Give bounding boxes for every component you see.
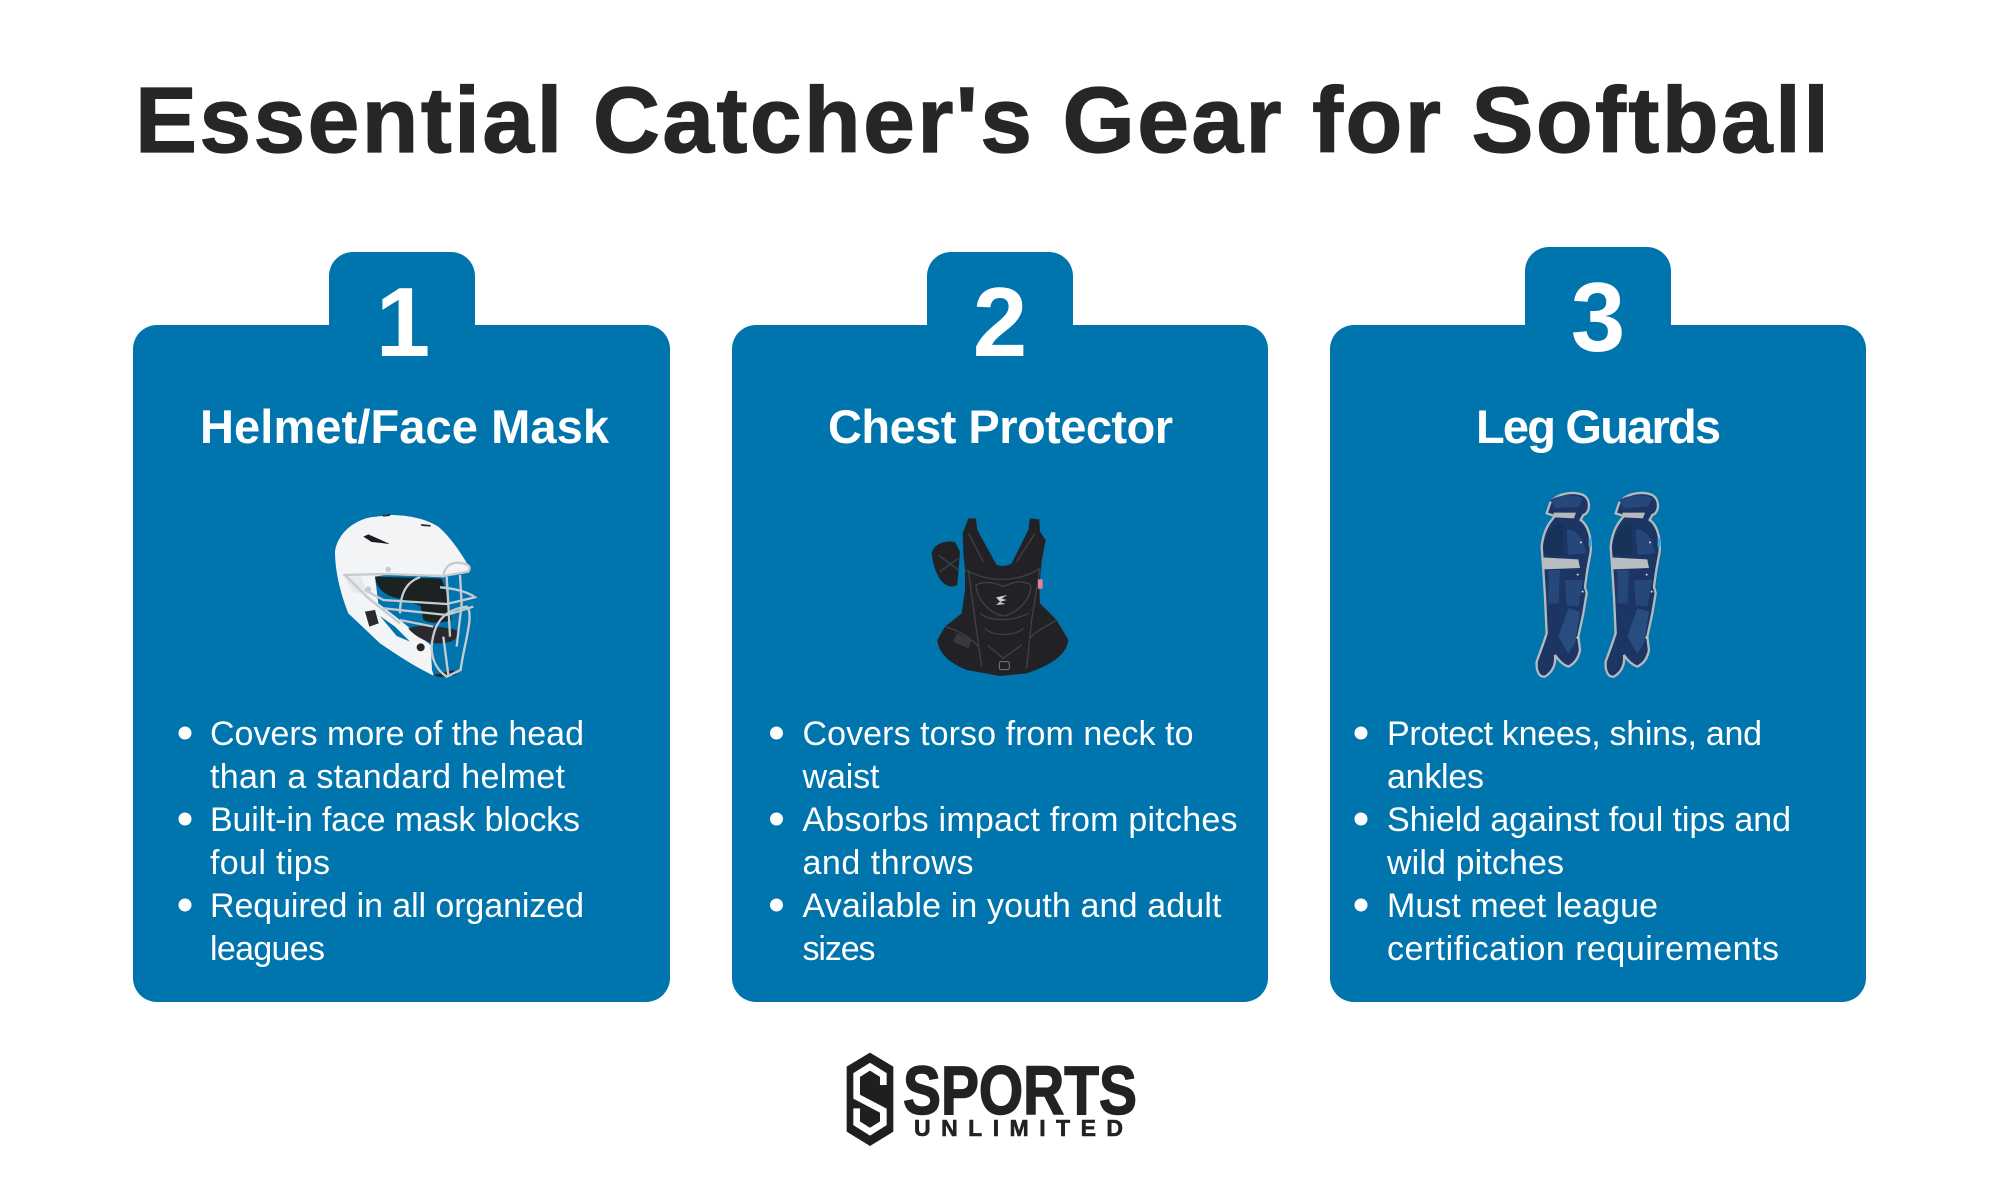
panel: chest protector — [732, 252, 1268, 1002]
bullet list: leg guards: Protect knees, shins, and — [1387, 715, 1762, 753]
heading: Leg Guards: Leg Guards — [1476, 400, 1721, 453]
icon: hexagon S badge — [847, 1053, 893, 1146]
heading: Chest Protector: Chest Protector — [828, 400, 1173, 453]
logo: Sports Unlimited — [847, 1052, 1137, 1146]
number 2: 2 — [973, 267, 1027, 377]
wordmark: UNLIMITED: UNLIMITED — [914, 1115, 1123, 1141]
bullet list: leg guards — [1354, 715, 1791, 968]
bullet list: helmet — [178, 715, 584, 968]
bullet list: leg guards: Shield against foul tips and — [1387, 801, 1791, 839]
icon: chest protector — [932, 518, 1068, 676]
panel background with number tab — [133, 252, 670, 1002]
number 3: 3 — [1571, 262, 1625, 372]
bullet list: chest protector: and throws — [802, 844, 974, 882]
title: Essential Catcher's Gear for Softball — [135, 68, 1829, 172]
bullet list: chest protector: sizes — [802, 930, 876, 968]
right leg guard — [1606, 493, 1660, 677]
bullet list: chest protector: Covers torso from neck to — [802, 715, 1194, 753]
number 1: 1 — [376, 267, 430, 377]
bullet list: helmet: than a standard helmet — [210, 758, 566, 796]
heading: Helmet/Face Mask: Helmet/Face Mask — [200, 400, 610, 453]
left leg guard — [1537, 493, 1591, 677]
bullet list: leg guards: ankles — [1387, 758, 1484, 796]
bullet list: helmet: Built-in face mask blocks — [210, 801, 580, 839]
panel background with number tab — [1330, 247, 1866, 1002]
bullet list: helmet: Covers more of the head — [210, 715, 584, 753]
bullet list: chest protector: waist — [802, 758, 880, 796]
bullet list: leg guards: Must meet league — [1387, 887, 1658, 925]
panel: leg guards — [1330, 247, 1866, 1002]
icon: catcher's helmet — [335, 514, 475, 677]
bullet list: leg guards: certification requirements — [1387, 930, 1779, 968]
bullet list: chest protector: Available in youth and adult — [802, 887, 1222, 925]
panel: helmet / face mask — [133, 252, 670, 1002]
bullet list: helmet: Required in all organized — [210, 887, 584, 925]
wordmark: SPORTS: SPORTS — [903, 1052, 1137, 1129]
bullet list: helmet: foul tips — [210, 844, 330, 882]
bullet list: leg guards: wild pitches — [1386, 844, 1564, 882]
icon: pair of leg guards — [1537, 493, 1660, 677]
bullet list: chest protector — [770, 715, 1238, 968]
bullet list: helmet: leagues — [210, 930, 325, 968]
bullet list: chest protector: Absorbs impact from pitches — [802, 801, 1238, 839]
panel background with number tab — [732, 252, 1268, 1002]
